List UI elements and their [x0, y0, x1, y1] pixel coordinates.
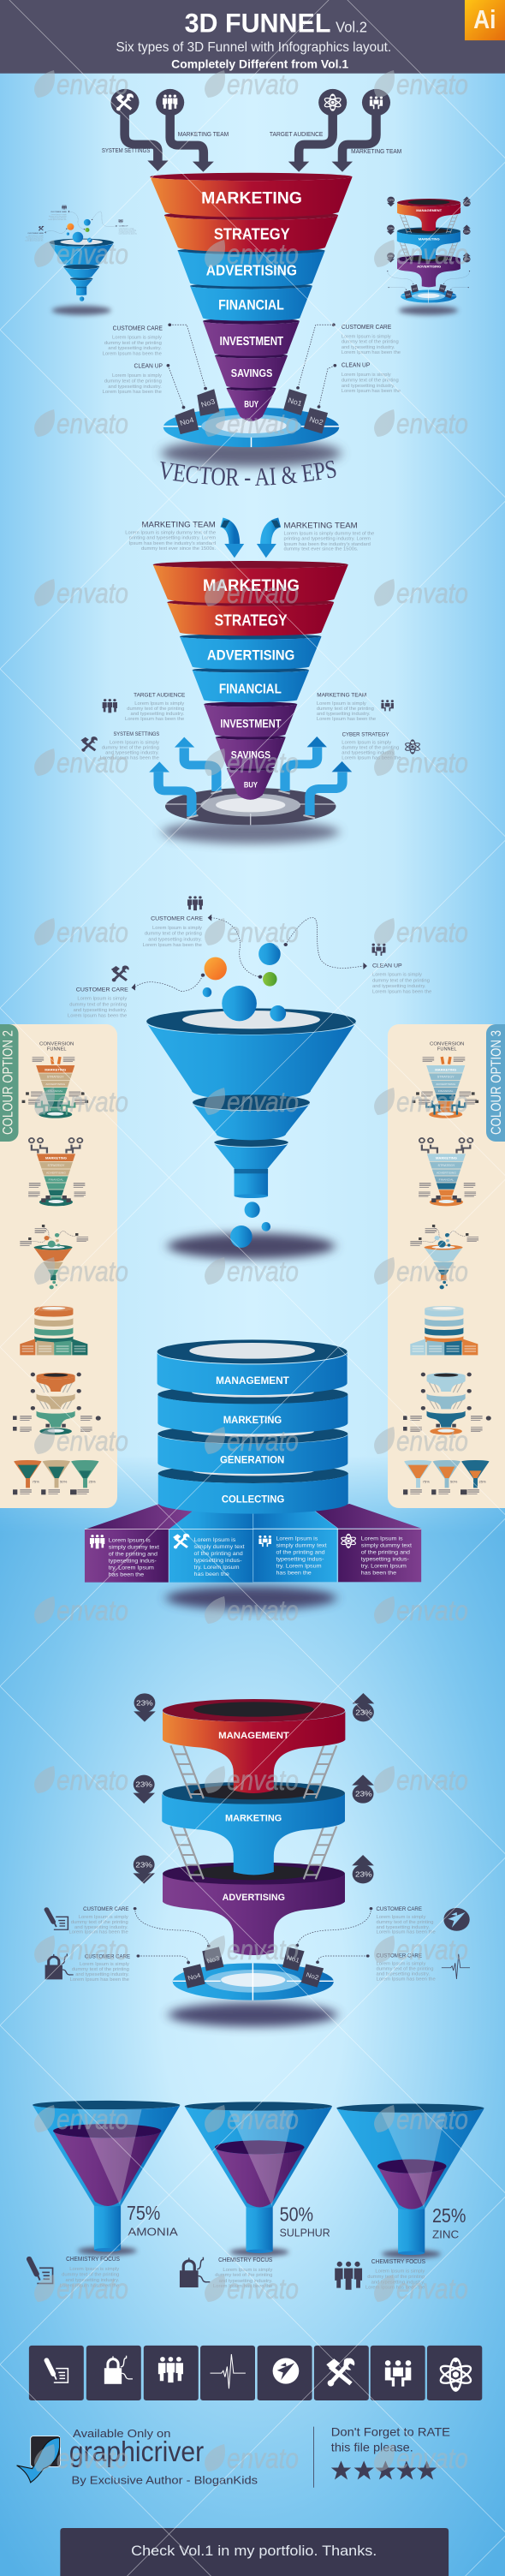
text: marketing team pair: printing and typesetting industry. Lorem	[283, 537, 371, 542]
Ai badge	[465, 0, 505, 40]
rating prompt and stars: this file please.	[331, 2441, 413, 2454]
base disc	[163, 408, 340, 447]
chemistry focus captions: CHEMISTRY FOCUS	[371, 2257, 425, 2265]
text: marketing team pair: MARKETING TEAM	[142, 521, 216, 529]
customer care left: dummy text of the printing	[71, 1920, 128, 1925]
side labels and icons	[80, 692, 421, 761]
seven level funnel two: FINANCIAL	[219, 682, 282, 696]
base text panels: has been the	[194, 1571, 229, 1577]
tab: colour option 2: COLOUR OPTION 2	[0, 1030, 15, 1135]
text: customer care right: and typesetting industry.	[342, 384, 395, 389]
base text panels: Lorem Ipsum is	[276, 1536, 318, 1542]
cylinder stack	[157, 1339, 348, 1514]
text: customer care left: CUSTOMER CARE	[113, 325, 163, 331]
level labels: MARKETING	[225, 1812, 282, 1823]
graphicriver logo and author: Available Only on	[73, 2427, 170, 2440]
customer care right: CUSTOMER CARE	[376, 1953, 422, 1959]
seven level funnel: STRATEGY	[214, 226, 290, 244]
dark base disc	[165, 788, 336, 825]
base text panels: Lorem Ipsum is	[194, 1537, 236, 1543]
side labels and icons: Lorem Ipsum has been the	[342, 756, 401, 761]
base text panels: of the printing and	[361, 1550, 410, 1555]
seven level funnel: ADVERTISING	[206, 261, 297, 278]
text: customer care left: Lorem Ipsum has been the	[103, 351, 162, 356]
base text panels: typesetting indus-	[194, 1558, 242, 1564]
side labels and icons: dummy text of the printing	[127, 707, 184, 712]
customer care right: and typesetting industry.	[376, 1972, 431, 1977]
base text panels: has been the	[361, 1571, 396, 1576]
curved title: vector ai and eps: VECTOR - AI & EPS	[160, 461, 336, 486]
shadow under base disc	[161, 440, 342, 467]
customer care left: Lorem Ipsum has been the	[70, 1977, 129, 1983]
chemistry focus captions: dummy text of the printing	[215, 2273, 272, 2278]
cylinder stack: MANAGEMENT	[216, 1374, 289, 1386]
base text panels: simply dummy text	[361, 1543, 412, 1548]
customer care right: Lorem Ipsum has been the	[376, 1930, 436, 1935]
section: header and first funnel	[0, 0, 505, 467]
mini funnels, colour option 2	[13, 1042, 101, 1494]
seven level funnel: INVESTMENT	[220, 334, 284, 349]
chemistry focus captions: CHEMISTRY FOCUS	[218, 2256, 272, 2263]
seven level funnel	[150, 173, 353, 421]
side labels and icons: CYBER STRATEGY	[342, 731, 389, 737]
customer care left: and typesetting industry.	[74, 1925, 128, 1930]
text: customer care right: Lorem Ipsum is simply	[342, 334, 391, 339]
text: customer care right: Lorem Ipsum has been the	[342, 350, 401, 355]
text: marketing team pair: dummy text ever since the 1500s.	[283, 547, 359, 552]
text: customer care left: dummy text of the printing	[104, 341, 162, 346]
base text panels: Lorem Ipsum is	[361, 1536, 403, 1541]
text: marketing team pair: printing and typesetting industry. Lorem	[129, 536, 217, 541]
base text panels: try. Lorem Ipsum	[361, 1564, 407, 1569]
side labels and icons: and typesetting industry.	[342, 751, 395, 756]
tab: colour option 3: COLOUR OPTION 3	[488, 1030, 504, 1135]
text: customer care right: CUSTOMER CARE	[342, 323, 391, 331]
seven level funnel two: SAVINGS	[231, 748, 270, 760]
labels around icon arrows: MARKETING TEAM	[178, 130, 229, 138]
top curved arrows	[221, 521, 280, 558]
graphicriver logo and author	[17, 2427, 258, 2487]
section: stacked cylinder	[85, 1339, 421, 1610]
side labels and icons: Lorem Ipsum has been the	[100, 756, 159, 760]
side labels and icons: Lorem Ipsum has been the	[317, 717, 376, 722]
chemistry focus captions: Lorem Ipsum has been the	[60, 2283, 119, 2288]
customer care left: Lorem Ipsum is simply	[79, 1915, 128, 1920]
bottom bar	[60, 2528, 449, 2576]
thumbnail: ladder funnel: MANAGEMENT	[416, 208, 443, 212]
chemistry focus captions: Lorem Ipsum is simply	[223, 2268, 272, 2273]
text: marketing team pair: Lorem Ipsum is simply dummy text of the	[125, 531, 216, 536]
text: customer care right: Lorem Ipsum is simply	[342, 373, 391, 378]
text: customer care left: and typesetting industry.	[108, 346, 162, 351]
section: chemistry funnels and footer	[17, 2101, 484, 2576]
shadow under dark disc	[162, 820, 339, 844]
bottom bar: Check Vol.1 in my portfolio. Thanks.	[131, 2543, 377, 2559]
side labels and icons: Lorem Ipsum is simply	[342, 741, 391, 746]
text: customer care right: CLEAN UP	[342, 361, 370, 369]
side labels and icons: and typesetting industry.	[105, 751, 159, 755]
shadow under disc	[169, 2003, 337, 2027]
numbered tags: No4	[179, 415, 195, 427]
base text panels: of the printing and	[109, 1552, 157, 1558]
funnel: sulphur 50%: 50%	[280, 2203, 313, 2225]
rating prompt and stars	[313, 2425, 450, 2488]
customer care right: Lorem Ipsum has been the	[376, 1977, 436, 1983]
customer care left: and typesetting industry.	[75, 1972, 129, 1977]
customer care left: Lorem Ipsum has been the	[68, 1930, 128, 1935]
base text panels: of the printing and	[276, 1550, 325, 1556]
numbered tags: No1	[287, 396, 303, 408]
header band: Completely Different from Vol.1	[171, 57, 348, 70]
base text panels: try. Lorem Ipsum	[109, 1565, 154, 1571]
chemistry focus captions: dummy text of the printing	[62, 2272, 119, 2277]
ladder funnels with pins	[133, 1693, 374, 2001]
text: customer care left: Lorem Ipsum is simply	[112, 373, 162, 379]
cylinder stack: COLLECTING	[222, 1493, 284, 1505]
customer care left: CUSTOMER CARE	[83, 1905, 129, 1912]
base text panels: has been the	[276, 1571, 312, 1577]
side labels and icons: MARKETING TEAM	[317, 692, 366, 699]
side labels and icons: SYSTEM SETTINGS	[113, 730, 159, 737]
side labels and icons: dummy text of the printing	[317, 707, 374, 712]
header band: Vol.2	[336, 19, 367, 35]
blue funnel	[68, 896, 431, 1218]
text: customer care left: dummy text of the printing	[104, 379, 162, 384]
icon tiles row	[29, 2346, 482, 2400]
seven level funnel: BUY	[244, 400, 259, 410]
text: customer care right	[342, 323, 401, 394]
seven level funnel: FINANCIAL	[218, 297, 284, 313]
base text panels	[85, 1504, 421, 1583]
seven level funnel two: ADVERTISING	[207, 647, 294, 663]
header band: 3D FUNNEL	[185, 8, 330, 38]
funnel: sulphur 50%: SULPHUR	[280, 2227, 330, 2239]
chemistry focus captions: Lorem Ipsum is simply	[375, 2269, 425, 2274]
text: customer care right: dummy text of the printing	[342, 378, 399, 383]
text: customer care left	[103, 325, 163, 395]
thumbnail: ladder funnel: ADVERTISING	[417, 265, 441, 268]
side labels and icons: and typesetting industry.	[317, 712, 371, 717]
funnel: zinc 25%: ZINC	[432, 2228, 460, 2241]
labels around icon arrows: MARKETING TEAM	[351, 147, 401, 155]
side labels and icons: dummy text of the printing	[102, 746, 159, 750]
section: ladder funnels	[45, 1693, 470, 2027]
graphicriver logo and author: graphicriver	[69, 2436, 204, 2468]
shadow under funnel	[168, 1233, 335, 1259]
chemistry focus captions: Lorem Ipsum has been the	[213, 2284, 272, 2289]
thumbnail: ladder funnel: MARKETING	[419, 237, 440, 242]
base text panels: typesetting indus-	[276, 1557, 324, 1563]
chemistry focus captions	[29, 2255, 425, 2291]
base text panels: try. Lorem Ipsum	[194, 1565, 240, 1571]
curved title: vector ai and eps	[160, 461, 336, 486]
cylinder stack: MARKETING	[223, 1414, 282, 1426]
chemistry focus captions: CHEMISTRY FOCUS	[66, 2255, 120, 2263]
chemistry focus captions: and typesetting industry.	[66, 2278, 120, 2283]
Ai badge: Ai	[473, 4, 496, 34]
panel: colour option 2	[0, 1024, 117, 1508]
customer care right: dummy text of the printing	[376, 1920, 433, 1925]
funnel: amonia 75%: 75%	[127, 2202, 160, 2224]
customer care right: CUSTOMER CARE	[376, 1905, 422, 1912]
text: customer care left: Lorem Ipsum is simply	[112, 335, 162, 340]
text: marketing team pair: MARKETING TEAM	[283, 522, 358, 530]
funnel: amonia 75%	[33, 2101, 181, 2255]
tab: colour option 2	[0, 1024, 19, 1142]
side labels and icons: Lorem Ipsum is simply	[134, 701, 184, 707]
base text panels: of the printing and	[194, 1551, 243, 1557]
chemistry focus captions: Lorem Ipsum has been the	[365, 2286, 425, 2291]
seven level funnel: SAVINGS	[231, 367, 272, 379]
seven level funnel two	[153, 561, 348, 800]
text: customer care right: dummy text of the printing	[342, 340, 399, 345]
seven level funnel two: STRATEGY	[215, 612, 288, 629]
side labels and icons: Lorem Ipsum is simply	[110, 741, 159, 745]
customer care right	[376, 1905, 470, 1983]
base text panels: try. Lorem Ipsum	[276, 1564, 322, 1570]
text: customer care left: Lorem Ipsum has been the	[103, 390, 162, 395]
thumbnail: ladder funnel	[387, 197, 471, 315]
text: marketing team pair: Ipsum has been the industry's standard	[283, 542, 371, 547]
base text panels: typesetting indus-	[361, 1557, 409, 1562]
header band: Six types of 3D Funnel with Infographics layout.	[116, 39, 391, 55]
panel: colour option 3	[388, 1024, 505, 1508]
rating prompt and stars: Don't Forget to RATE	[331, 2425, 450, 2439]
seven level funnel: MARKETING	[201, 189, 302, 207]
side labels and icons: TARGET AUDIENCE	[134, 692, 186, 699]
side labels and icons: dummy text of the printing	[342, 746, 399, 751]
customer care left: dummy text of the printing	[72, 1967, 129, 1972]
tab: colour option 3	[486, 1024, 505, 1142]
seven level funnel two: MARKETING	[203, 576, 300, 595]
header band	[0, 0, 505, 74]
thumbnail: blue funnel	[25, 205, 137, 315]
labels around icon arrows	[102, 130, 401, 155]
customer care left	[45, 1905, 130, 1983]
numbered tags	[167, 323, 336, 434]
shadow under stack	[166, 1586, 336, 1610]
chemistry focus captions: Lorem Ipsum is simply	[69, 2267, 119, 2272]
seven level funnel two: BUY	[244, 781, 258, 790]
section: blue funnel with balls	[68, 896, 431, 1259]
base text panels: Lorem Ipsum is	[109, 1538, 151, 1544]
numbered tags: No2	[308, 414, 324, 426]
customer care right: Lorem Ipsum is simply	[376, 1962, 426, 1967]
base text panels: simply dummy text	[109, 1545, 159, 1551]
text: marketing team pair: Ipsum has been the industry's standard	[129, 541, 216, 546]
rising arrows	[149, 736, 352, 818]
text: marketing team pair: Lorem Ipsum is simply dummy text of the	[283, 532, 374, 537]
chemistry focus captions: dummy text of the printing	[367, 2275, 425, 2280]
text: customer care right: and typesetting industry.	[342, 345, 395, 350]
labels around icon arrows: TARGET AUDIENCE	[270, 130, 323, 138]
customer care right: and typesetting industry.	[376, 1925, 431, 1930]
funnel: sulphur 50%	[185, 2102, 332, 2257]
customer care left: CUSTOMER CARE	[85, 1953, 130, 1959]
side labels and icons: and typesetting industry.	[131, 712, 185, 717]
section: second funnel	[80, 521, 421, 844]
base text panels: simply dummy text	[276, 1543, 327, 1549]
falling balls	[230, 1222, 270, 1248]
chemistry focus captions: and typesetting industry.	[371, 2280, 425, 2285]
seven level funnel two: INVESTMENT	[220, 717, 281, 730]
text: customer care left: CLEAN UP	[134, 362, 163, 370]
customer care left: Lorem Ipsum is simply	[80, 1962, 129, 1967]
text: customer care left: and typesetting industry.	[108, 385, 162, 390]
funnel: zinc 25%	[336, 2104, 484, 2258]
side labels and icons: Lorem Ipsum is simply	[317, 701, 366, 707]
customer care right: Lorem Ipsum is simply	[376, 1915, 426, 1920]
level labels: MANAGEMENT	[218, 1730, 289, 1741]
labels around icon arrows: SYSTEM SETTINGS	[102, 146, 150, 154]
chemistry focus captions: and typesetting industry.	[219, 2279, 273, 2284]
funnel: amonia 75%: AMONIA	[128, 2226, 178, 2239]
base text panels: has been the	[109, 1572, 144, 1578]
text: marketing team pair	[125, 521, 374, 552]
base text panels: simply dummy text	[194, 1544, 245, 1550]
numbered tags: No3	[200, 397, 217, 409]
text: marketing team pair: dummy text ever since the 1500s.	[141, 546, 217, 552]
level labels	[218, 1730, 289, 1903]
funnel: zinc 25%: 25%	[432, 2204, 466, 2227]
customer care right: dummy text of the printing	[376, 1967, 433, 1972]
cylinder stack: GENERATION	[220, 1453, 284, 1465]
level labels: ADVERTISING	[223, 1892, 285, 1903]
base text panels: typesetting indus-	[109, 1559, 157, 1565]
text: customer care right: Lorem Ipsum has been the	[342, 389, 401, 394]
graphicriver logo and author: By Exclusive Author - BloganKids	[72, 2474, 258, 2487]
side labels and icons: Lorem Ipsum has been the	[125, 717, 184, 722]
mini funnels, colour option 3	[403, 1042, 491, 1494]
icon arrows into funnel	[110, 89, 390, 172]
